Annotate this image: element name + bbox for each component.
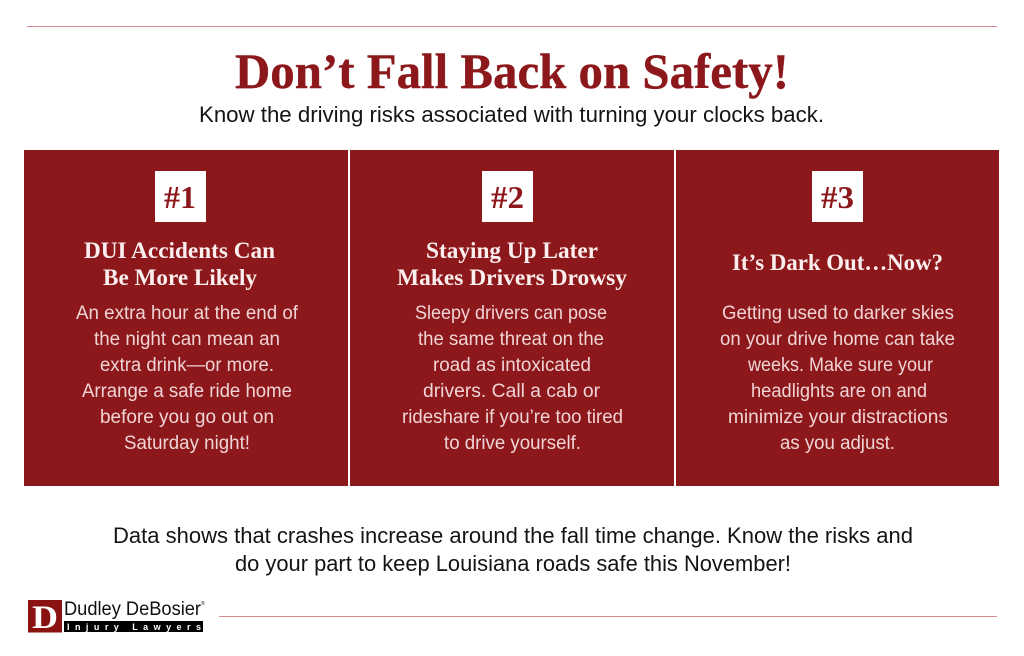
subtitle: Know the driving risks associated with turning your clocks back.	[199, 102, 824, 127]
logo wordmark: Dudley DeBosier	[64, 599, 202, 620]
body text 2: the same threat on the	[418, 329, 604, 350]
body text 3: weeks. Make sure your	[747, 355, 934, 376]
body text 1	[76, 303, 299, 454]
body text 1: Arrange a safe ride home	[82, 381, 292, 402]
body text 2: to drive yourself.	[444, 433, 581, 454]
heading 1: DUI Accidents Can	[84, 238, 275, 264]
body text 3: minimize your distractions	[728, 407, 948, 428]
body text 1: before you go out on	[100, 407, 274, 428]
body text 1: the night can mean an	[94, 329, 280, 350]
body text 3	[720, 303, 955, 454]
number badge 3	[812, 171, 863, 222]
closing text: Data shows that crashes increase around the fall time change. Know the risks and	[113, 523, 913, 548]
number badge 2	[482, 171, 533, 222]
body text 3: headlights are on and	[751, 381, 927, 402]
number badge 1	[155, 171, 206, 222]
heading 2	[397, 238, 627, 291]
number badge 2: #2	[491, 179, 524, 215]
closing text: do your part to keep Louisiana roads safe this November!	[235, 551, 791, 576]
body text 3: Getting used to darker skies	[722, 303, 954, 324]
body text 2: drivers. Call a cab or	[423, 381, 601, 402]
heading 3: It’s Dark Out…Now?	[732, 250, 943, 276]
heading 1	[84, 238, 275, 291]
body text 2	[402, 303, 623, 454]
heading 1: Be More Likely	[103, 265, 257, 291]
panel: risk 3	[676, 150, 999, 486]
logo tagline: Injury Lawyers	[67, 622, 201, 632]
body text 3: as you adjust.	[780, 433, 895, 454]
number badge 3: #3	[821, 179, 854, 215]
body text 1: An extra hour at the end of	[76, 303, 299, 324]
body text 3: on your drive home can take	[720, 329, 955, 350]
number badge 1: #1	[164, 179, 196, 215]
panel: risk 2	[350, 150, 674, 486]
body text 2: road as intoxicated	[433, 355, 591, 376]
heading 2: Staying Up Later	[426, 238, 598, 264]
logo wordmark: ®	[201, 600, 205, 607]
body text 1: extra drink—or more.	[100, 355, 274, 376]
title: Don’t Fall Back on Safety!	[235, 43, 789, 99]
panel: risk 1	[24, 150, 348, 486]
body text 2: Sleepy drivers can pose	[415, 303, 607, 324]
logo: Dudley DeBosier Injury Lawyers	[28, 599, 205, 636]
closing text	[113, 523, 913, 576]
body text 2: rideshare if you’re too tired	[402, 407, 623, 428]
heading 2: Makes Drivers Drowsy	[397, 265, 627, 291]
logo mark: D	[32, 600, 58, 636]
body text 1: Saturday night!	[124, 433, 250, 454]
